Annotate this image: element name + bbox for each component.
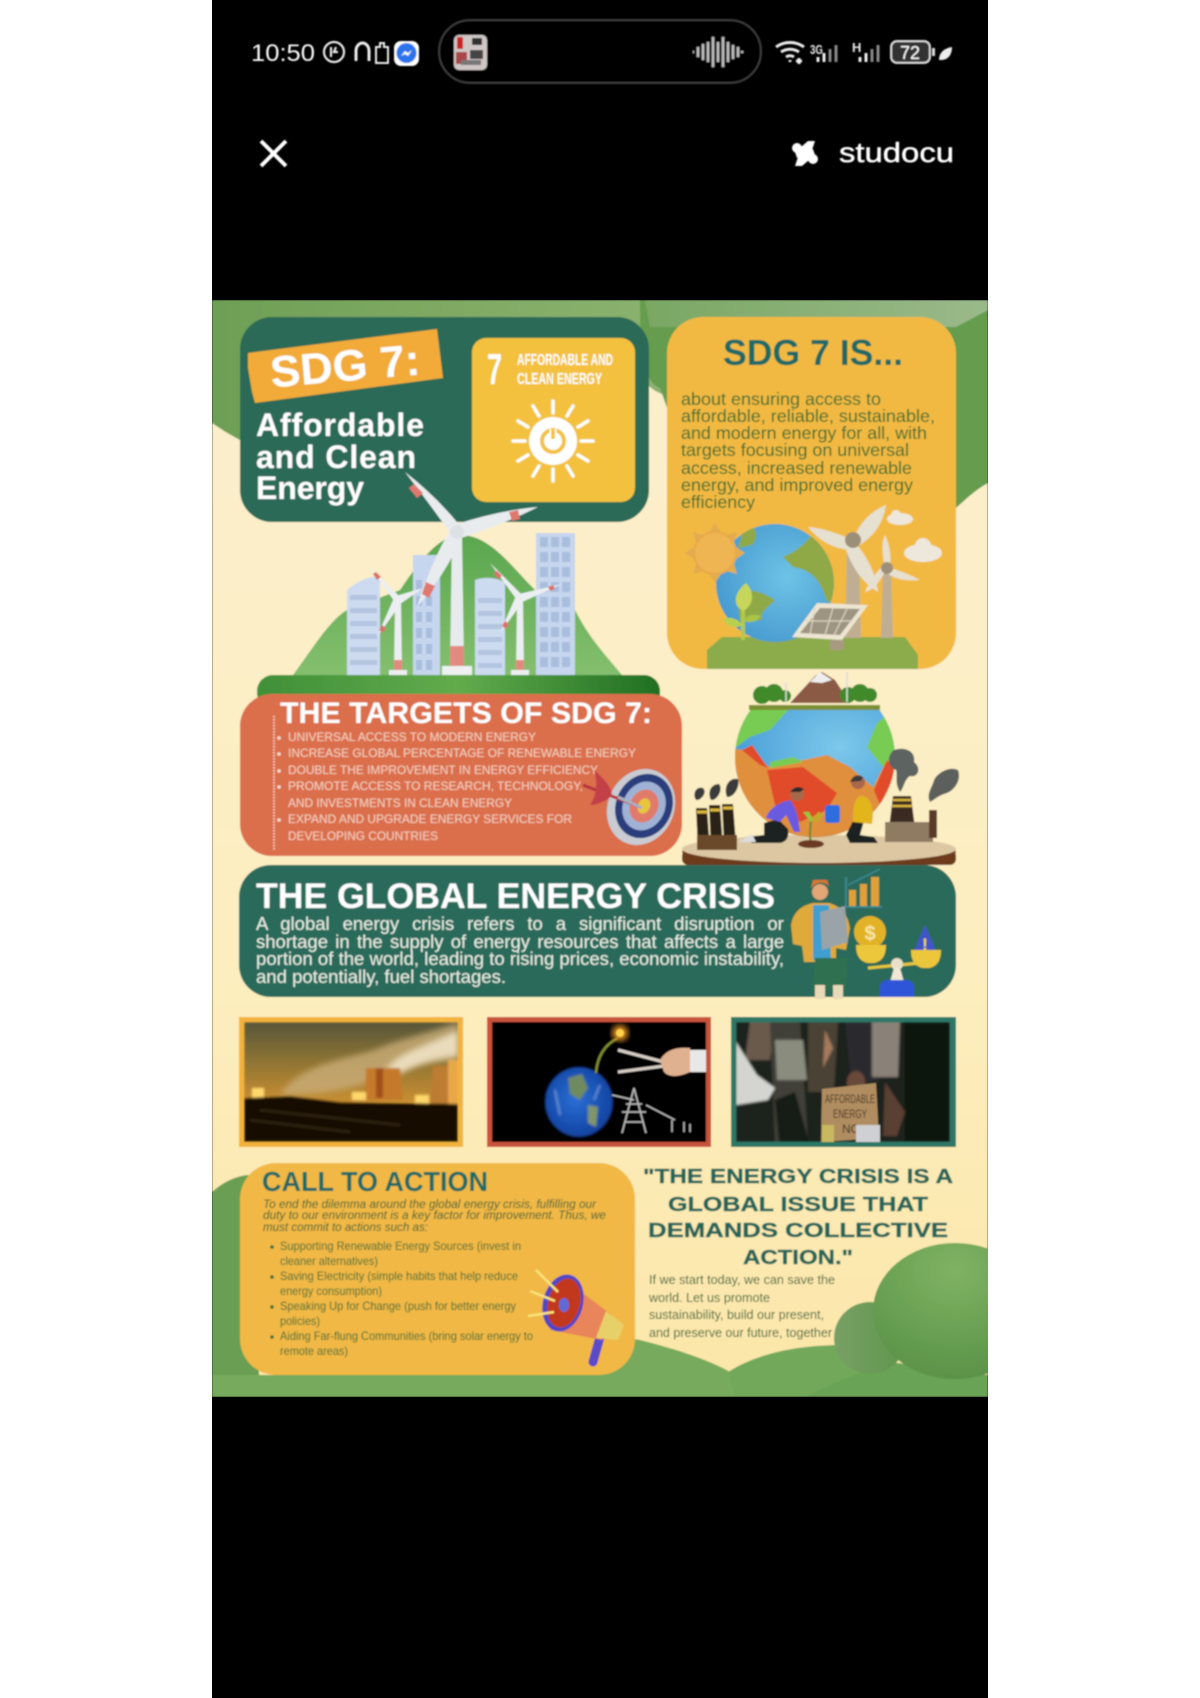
wind turbine: large centre (405, 472, 538, 675)
bullet list: PROMOTE ACCESS TO RESEARCH, TECHNOLOGY, (288, 779, 583, 793)
illustration: globe with people planting and factories (682, 672, 959, 865)
poster background (212, 300, 988, 1397)
body text: targets focusing on universal (681, 440, 909, 460)
bullet list: UNIVERSAL ACCESS TO MODERN ENERGY (288, 730, 536, 744)
SDG 7 icon tile (472, 338, 635, 502)
large turbine (808, 505, 886, 638)
status bar (251, 20, 954, 168)
signal 3G: 3G (810, 42, 823, 57)
grass lid, trees and mountain (749, 672, 880, 710)
left factories (694, 779, 739, 850)
heading: SDG 7: SDG 7: (268, 336, 422, 397)
action list: remote areas) (280, 1344, 348, 1358)
body text: and potentially, fuel shortages. (256, 966, 506, 987)
wind turbine: small right (490, 563, 562, 675)
action list: policies) (280, 1314, 320, 1328)
closing paragraph: world. Let us promote (648, 1291, 770, 1305)
wind turbine: small left (368, 565, 423, 675)
dynamic island pill (439, 20, 761, 83)
protest sign: AFFORDABLE (825, 1092, 875, 1106)
battery 72 (891, 41, 935, 63)
body text (681, 389, 935, 512)
dart (583, 770, 642, 808)
closing paragraph: and preserve our future, together (649, 1326, 832, 1340)
sun (685, 523, 745, 583)
clock: 10:50 (251, 40, 315, 67)
small turbine (865, 535, 920, 638)
green hills: bottom (212, 1339, 988, 1397)
icon: leaf (939, 47, 952, 60)
protest sign (821, 1083, 879, 1142)
action list (280, 1239, 533, 1358)
body text: A global energy crisis refers to a significant disruption or (256, 913, 784, 934)
closing paragraph: sustainability, build our present, (649, 1308, 824, 1322)
green blob: top left (212, 300, 665, 445)
action list: cleaner alternatives) (280, 1254, 378, 1268)
bullets (270, 1245, 274, 1339)
quote heading (643, 1166, 953, 1269)
bullet list: INCREASE GLOBAL PERCENTAGE OF RENEWABLE ENERGY (288, 746, 636, 760)
poster (212, 300, 1037, 1397)
panel: SDG 7 is (667, 317, 956, 669)
bullet list: DEVELOPING COUNTRIES (288, 829, 438, 843)
heading: subtitle: and Clean (256, 439, 416, 475)
studocu logo (792, 141, 818, 166)
body text: portion of the world, leading to rising prices, economic instability, (256, 948, 784, 969)
action list: Saving Electricity (simple habits that help reduce (280, 1269, 518, 1283)
green ball: large (873, 1242, 988, 1379)
bullet list (288, 730, 636, 843)
thumbnail (454, 35, 487, 70)
person kneeling right (846, 775, 878, 843)
signal H (852, 40, 878, 62)
balance stand (868, 958, 930, 997)
body text: shortage in the supply of energy resources that affects a large (256, 931, 784, 952)
green blob: bottom left (212, 1175, 260, 1397)
bar chart (846, 869, 882, 907)
building 4 (536, 533, 575, 675)
warning on scale (911, 925, 941, 968)
coin on scale: $ (864, 923, 876, 945)
illustration: man with tablet and chart (791, 869, 941, 999)
warning on scale: ! (922, 935, 928, 954)
illustration: earth, sun, solar panel, turbines (685, 505, 942, 669)
earth globe (734, 708, 896, 838)
pylon (612, 1088, 690, 1133)
heading: SDG 7 IS... (723, 332, 903, 373)
body text: efficiency (681, 492, 755, 512)
heading: CALL TO ACTION (262, 1166, 488, 1197)
illustration: city with wind turbines on hill (257, 472, 660, 709)
quote heading: GLOBAL ISSUE THAT (668, 1194, 928, 1216)
man (791, 880, 850, 999)
heading: THE TARGETS OF SDG 7: (280, 697, 652, 730)
bullet list: AND INVESTMENTS IN CLEAN ENERGY (288, 796, 512, 810)
protest sign: ENERGY (833, 1107, 867, 1121)
hand and cuff (660, 1048, 706, 1076)
closing paragraph (648, 1273, 835, 1340)
body text: access, increased renewable (681, 458, 912, 478)
green base (256, 674, 661, 698)
photo: power plant at night (239, 1017, 463, 1147)
signal H: H (852, 40, 861, 55)
action list: Supporting Renewable Energy Sources (invest in (280, 1239, 521, 1253)
coin on scale (854, 916, 886, 963)
green blob: top right (640, 300, 988, 508)
waveform (693, 37, 742, 67)
top right highlight (645, 300, 988, 327)
photo: earth with bomb fuse and scissors (487, 1017, 711, 1147)
bullet list: DOUBLE THE IMPROVEMENT IN ENERGY EFFICIENCY (288, 763, 598, 777)
heading: subtitle (256, 407, 424, 506)
quote heading: "THE ENERGY CRISIS IS A (643, 1166, 953, 1188)
closing paragraph: If we start today, we can save the (649, 1273, 835, 1287)
action list: Aiding Far-flung Communities (bring solar energy to (280, 1329, 533, 1343)
platform (682, 835, 956, 865)
icon: close (261, 141, 286, 166)
panel: global energy crisis (239, 865, 956, 999)
icon: wifi (776, 42, 804, 64)
action list: Speaking Up for Change (push for better energy (280, 1299, 516, 1313)
building 3 (475, 578, 505, 675)
globe (545, 1067, 613, 1137)
bullets (277, 736, 281, 822)
orange tape (248, 329, 443, 403)
panel: call to action (240, 1163, 635, 1375)
scissors (618, 1050, 664, 1072)
fuse and spark (596, 1025, 628, 1073)
green ball: small (834, 1302, 906, 1374)
intro text: To end the dilemma around the global energy crisis, fulfilling our (263, 1197, 597, 1211)
icon: bottle battery (376, 43, 388, 63)
signal 3G (810, 42, 836, 62)
person kneeling left (738, 787, 804, 843)
icon: timer badge (324, 42, 344, 62)
icon: megaphone (528, 1270, 624, 1362)
body text: energy, and improved energy (681, 475, 913, 495)
right factories (885, 749, 959, 842)
icon: headphones (356, 43, 369, 61)
icon: sun with power symbol (513, 401, 593, 481)
quote heading: ACTION." (743, 1247, 853, 1269)
solar panel (792, 603, 868, 650)
SDG 7 icon tile: CLEAN ENERGY (517, 371, 602, 388)
earth (716, 524, 840, 642)
icon: messenger (394, 41, 419, 66)
body text (256, 913, 784, 987)
grass base (707, 637, 918, 669)
intro text: duty to our environment is a key factor for improvement. Thus, we (263, 1208, 606, 1222)
heading: subtitle: Affordable (256, 407, 424, 443)
building 2 (413, 555, 440, 675)
plant (723, 583, 761, 640)
icon: dartboard target (583, 758, 687, 856)
panel: targets of SDG 7 (240, 694, 687, 856)
SDG 7 icon tile: 7 (487, 345, 502, 394)
studocu wordmark: studocu (839, 137, 954, 168)
watering can and sapling (798, 805, 840, 848)
body text: affordable, reliable, sustainable, (681, 406, 935, 426)
building 1 (347, 577, 380, 675)
heading: subtitle: Energy (256, 470, 364, 506)
body text: and modern energy for all, with (681, 423, 927, 443)
dotted vertical rule (273, 716, 275, 850)
green hill (293, 535, 622, 675)
heading: THE GLOBAL ENERGY CRISIS (256, 877, 775, 916)
intro text (263, 1197, 606, 1234)
intro text: must commit to actions such as: (263, 1220, 428, 1234)
action list: energy consumption) (280, 1284, 382, 1298)
quote heading: DEMANDS COLLECTIVE (648, 1220, 948, 1242)
photo: protest with sign (731, 1017, 956, 1147)
phone screen background (212, 0, 988, 1698)
battery 72: 72 (900, 43, 920, 63)
bullet list: EXPAND AND UPGRADE ENERGY SERVICES FOR (288, 812, 572, 826)
panel: SDG 7 title (240, 317, 649, 522)
protest sign: NO (842, 1122, 860, 1136)
SDG 7 icon tile: AFFORDABLE AND (517, 352, 613, 369)
clouds (887, 510, 942, 562)
body text: about ensuring access to (681, 389, 881, 409)
